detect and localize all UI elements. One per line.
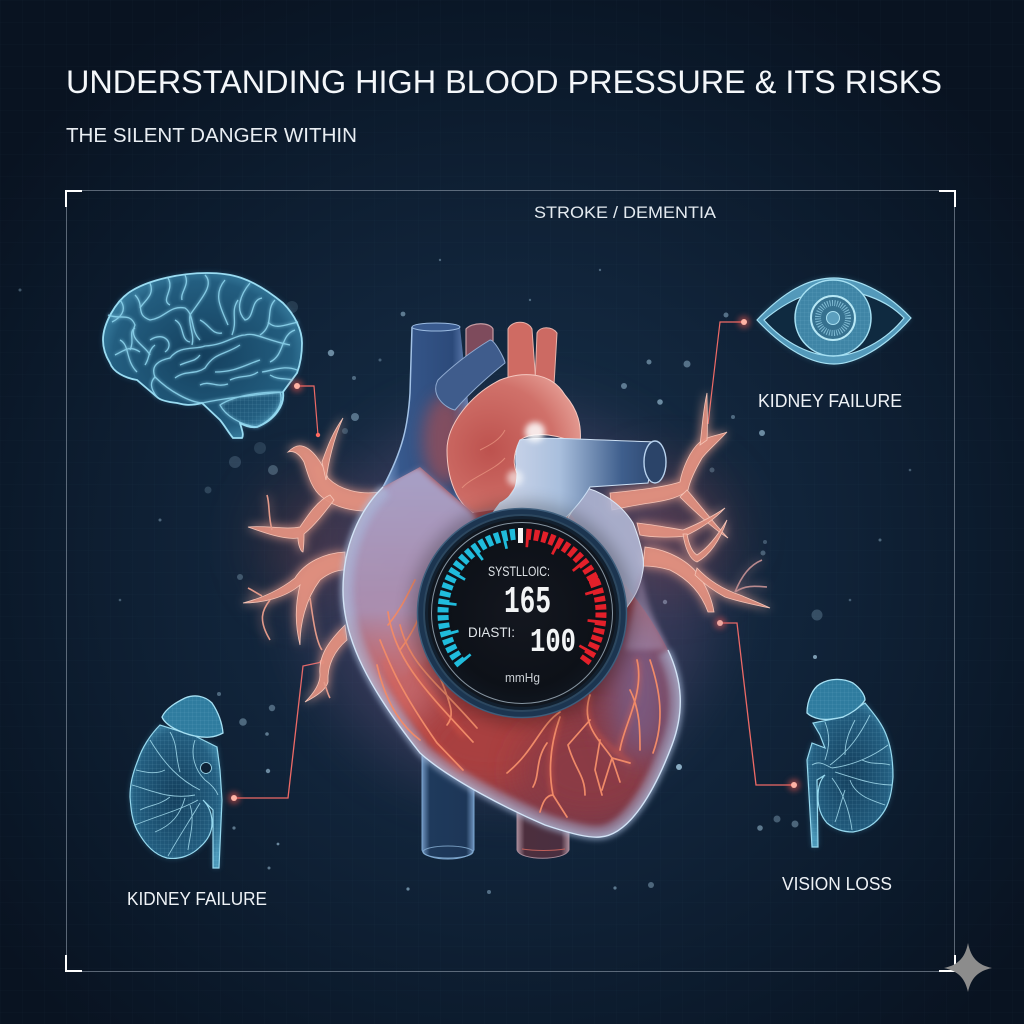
- label: vision loss: VISION LOSS: [782, 874, 892, 894]
- heart glow: [260, 410, 730, 790]
- subtitle: THE SILENT DANGER WITHIN: [66, 125, 357, 147]
- blood pressure gauge: [410, 501, 634, 725]
- floating particles: [18, 259, 911, 894]
- gauge: systolic label: SYSTLLOIC:: [488, 563, 550, 579]
- icon: eye: [757, 278, 911, 364]
- heart body: [330, 460, 690, 850]
- left atrium lobe: [344, 467, 478, 672]
- connector: left kidney: [228, 660, 324, 804]
- icon: brain: [103, 273, 302, 438]
- coronary vessels: [377, 580, 660, 817]
- left blood vessels: [243, 418, 380, 702]
- gauge: systolic value: 165: [504, 581, 551, 624]
- aortic arch: [447, 375, 580, 515]
- icon: right kidney: [807, 679, 893, 847]
- label: kidney failure, right: KIDNEY FAILURE: [758, 391, 902, 411]
- back arteries: [466, 322, 557, 385]
- label: kidney failure, left: KIDNEY FAILURE: [127, 889, 267, 909]
- icon: left kidney: [130, 696, 223, 868]
- gauge: blue ticks: [443, 534, 518, 664]
- frame with corner brackets: [66, 190, 955, 972]
- watermark star: [944, 943, 992, 992]
- gauge: red ticks: [526, 534, 601, 664]
- connector: right kidney: [714, 617, 800, 791]
- gauge: diastolic value: 100: [530, 624, 576, 661]
- heart illustration: [243, 322, 770, 859]
- connector: eye: [708, 316, 750, 424]
- lower vena cava tube: [422, 740, 474, 859]
- right blood vessels: [610, 393, 770, 612]
- right atrium lobe: [560, 488, 643, 636]
- gauge: unit: mmHg: [505, 670, 540, 685]
- title: UNDERSTANDING HIGH BLOOD PRESSURE & ITS RISKS: [66, 64, 942, 100]
- gauge: diastolic label: DIASTI:: [468, 624, 515, 640]
- lower aorta tube: [517, 800, 569, 858]
- gauge: white center tick: [518, 528, 523, 543]
- label: stroke / dementia: STROKE / DEMENTIA: [534, 203, 717, 222]
- pulmonary artery: [480, 422, 666, 545]
- superior vena cava: [383, 323, 505, 500]
- connector: brain: [291, 380, 320, 437]
